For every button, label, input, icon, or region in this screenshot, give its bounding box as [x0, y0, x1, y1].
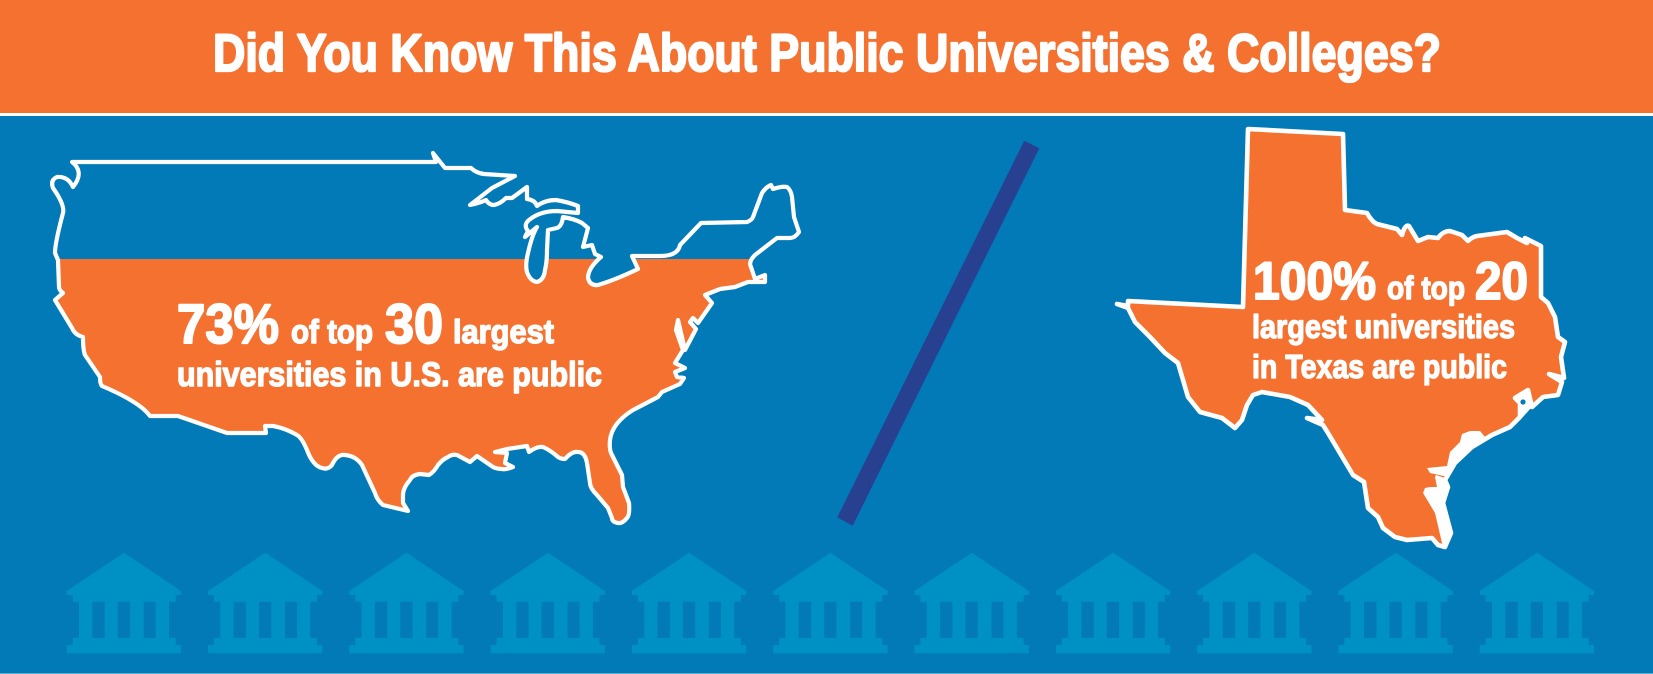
US map with 73% fill	[52, 153, 799, 523]
row of university building icons	[67, 553, 1594, 653]
lagoon and bay details	[1429, 399, 1526, 487]
Texas statistic text: in Texas are public	[1252, 348, 1507, 385]
Texas statistic text: of top	[1387, 270, 1465, 306]
Texas statistic text: 20	[1475, 252, 1528, 311]
US statistic text: largest	[453, 313, 554, 350]
US statistic text: universities in U.S. are public	[177, 356, 602, 394]
Texas statistic text: 100%	[1253, 252, 1376, 311]
Texas statistic text	[1252, 252, 1528, 385]
US statistic text: 30	[385, 292, 443, 355]
Texas map	[1117, 129, 1565, 547]
US statistic text	[177, 292, 602, 394]
Texas statistic text: largest universities	[1252, 308, 1515, 345]
US statistic text: of top	[291, 313, 373, 350]
header band	[0, 0, 1653, 116]
title: Did You Know This About Public Universities & Colleges?	[213, 24, 1441, 83]
slash divider	[837, 141, 1039, 526]
US statistic text: 73%	[177, 292, 279, 355]
Texas gulf coast barrier islands	[1423, 390, 1532, 547]
